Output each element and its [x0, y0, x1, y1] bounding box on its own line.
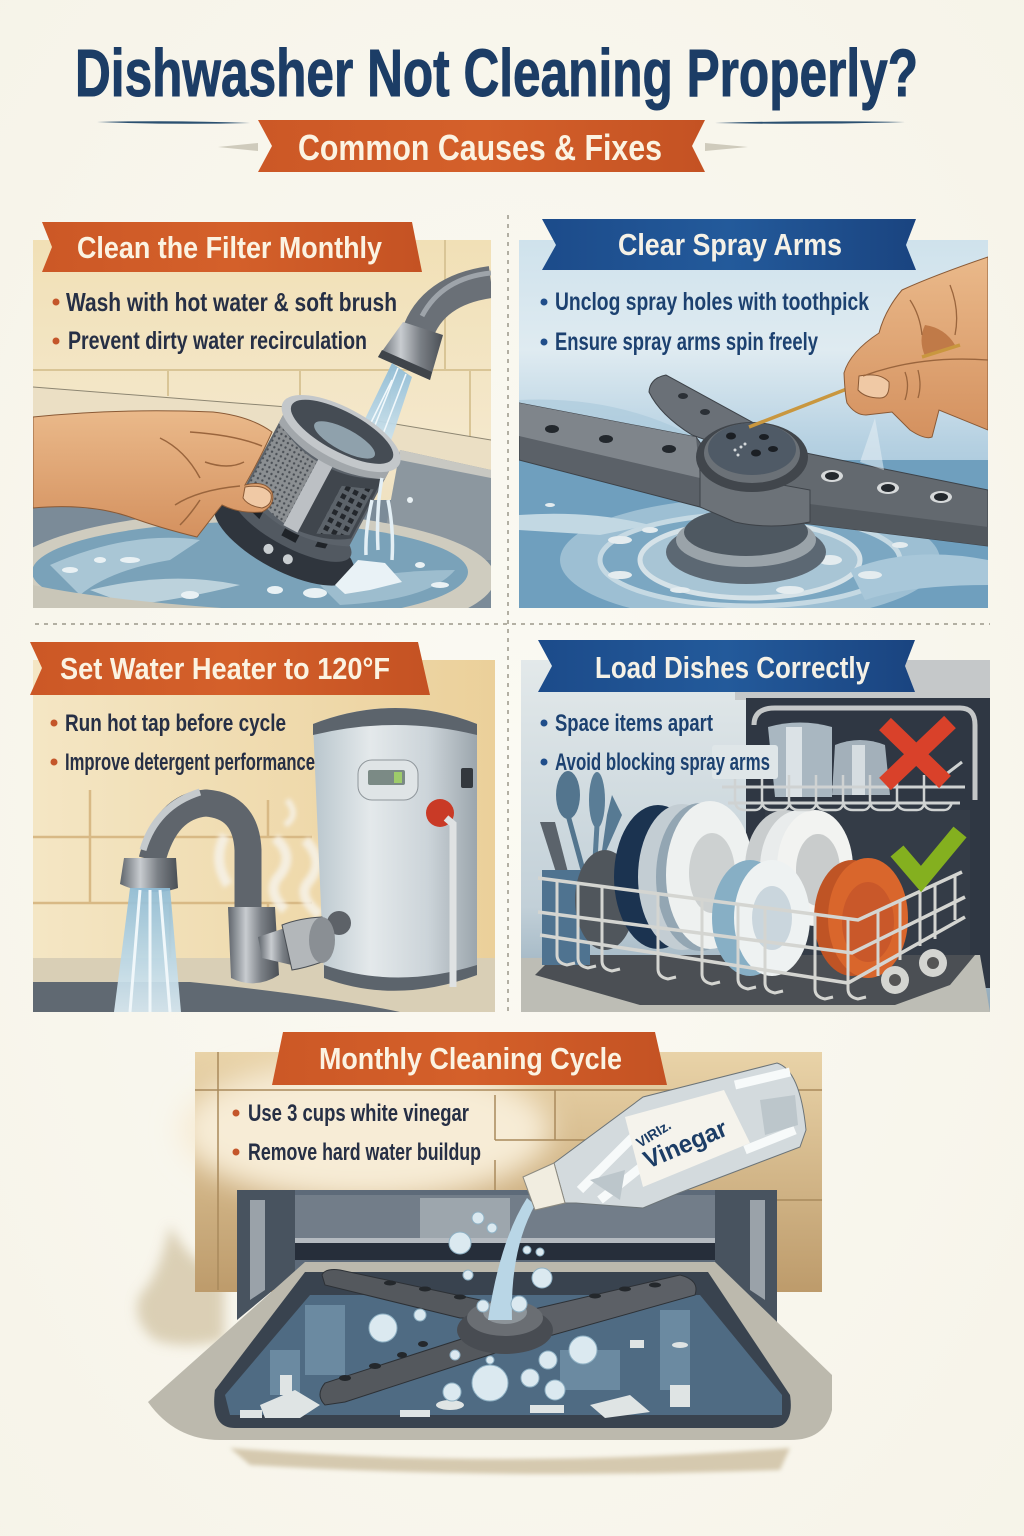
bubbles: [369, 1212, 597, 1401]
bullets: [52, 287, 397, 355]
door: [521, 955, 990, 1012]
bullets: [232, 1100, 481, 1166]
bottle label text: VIRIz.: [633, 1117, 674, 1151]
lower rack: [538, 872, 965, 999]
bullets: Unclog spray holes with toothpick: [555, 288, 869, 316]
bullets: [540, 288, 869, 356]
icon: green check: [897, 832, 960, 879]
bullets: Improve detergent performance: [65, 749, 315, 776]
scene: dishwasher rack: [521, 660, 990, 1012]
spray arm: [320, 1270, 696, 1405]
bullets: Wash with hot water & soft brush: [66, 287, 397, 317]
scene: faucet and heater: [33, 660, 495, 1012]
filter: [214, 395, 400, 586]
wheels: [881, 949, 947, 994]
panel: monthly cleaning cycle: [137, 1052, 832, 1474]
subtitle ribbon: [97, 120, 905, 172]
icon: red x: [885, 722, 950, 784]
bullets: [540, 710, 770, 776]
steam: [219, 800, 336, 915]
water stream: [366, 363, 412, 440]
text backing: [712, 745, 778, 779]
panel: clean the filter: [33, 222, 491, 608]
bullets: Prevent dirty water recirculation: [68, 327, 367, 355]
heading ribbon: [538, 640, 915, 692]
bullets: Space items apart: [555, 710, 713, 737]
divider: horizontal dashed: [35, 623, 990, 625]
panel: set water heater: [30, 642, 495, 1012]
bottle label brand: Vinegar: [639, 1114, 732, 1175]
hand: [33, 411, 273, 537]
heading ribbon: [542, 219, 916, 270]
bullets: Avoid blocking spray arms: [555, 749, 770, 776]
bullets: Use 3 cups white vinegar: [248, 1100, 469, 1127]
heading ribbon: Load Dishes Correctly: [595, 650, 871, 685]
scene: spray arm: [519, 240, 988, 622]
heading ribbon: [30, 642, 430, 695]
faucet: [378, 273, 491, 380]
hub: [700, 470, 810, 526]
faucet: [120, 792, 351, 983]
right arm: [780, 453, 988, 546]
light beam: [860, 418, 884, 470]
bullets: Run hot tap before cycle: [65, 710, 286, 737]
heading ribbon: Clear Spray Arms: [618, 227, 842, 262]
vinegar bottle: [523, 1063, 806, 1210]
heading ribbon: Clean the Filter Monthly: [77, 230, 383, 265]
splash: [366, 478, 392, 560]
bullets: [50, 710, 315, 776]
plates: [614, 801, 908, 978]
heading ribbon: Set Water Heater to 120°F: [60, 651, 390, 686]
upper rack cups: [722, 722, 965, 810]
subtitle ribbon: Common Causes & Fixes: [298, 127, 662, 168]
left arm: [519, 403, 720, 507]
bullets: Ensure spray arms spin freely: [555, 328, 818, 356]
heading ribbon: Monthly Cleaning Cycle: [319, 1041, 622, 1076]
bullets: Remove hard water buildup: [248, 1139, 481, 1166]
heading ribbon: [272, 1032, 667, 1085]
back arm: [649, 375, 752, 440]
cutlery: [540, 771, 635, 965]
hand: [844, 257, 988, 438]
water heater: [313, 708, 477, 991]
toothpick: [748, 388, 845, 429]
vinegar stream: [488, 1198, 535, 1320]
scene: sink and filter: [33, 240, 491, 608]
panel: load dishes: [521, 640, 990, 1012]
heading ribbon: [42, 222, 422, 272]
water stream: [114, 888, 181, 1012]
divider: vertical dashed: [507, 215, 509, 1015]
scene: dishwasher tub: [137, 1052, 832, 1474]
panel: clear spray arms: [519, 219, 988, 622]
